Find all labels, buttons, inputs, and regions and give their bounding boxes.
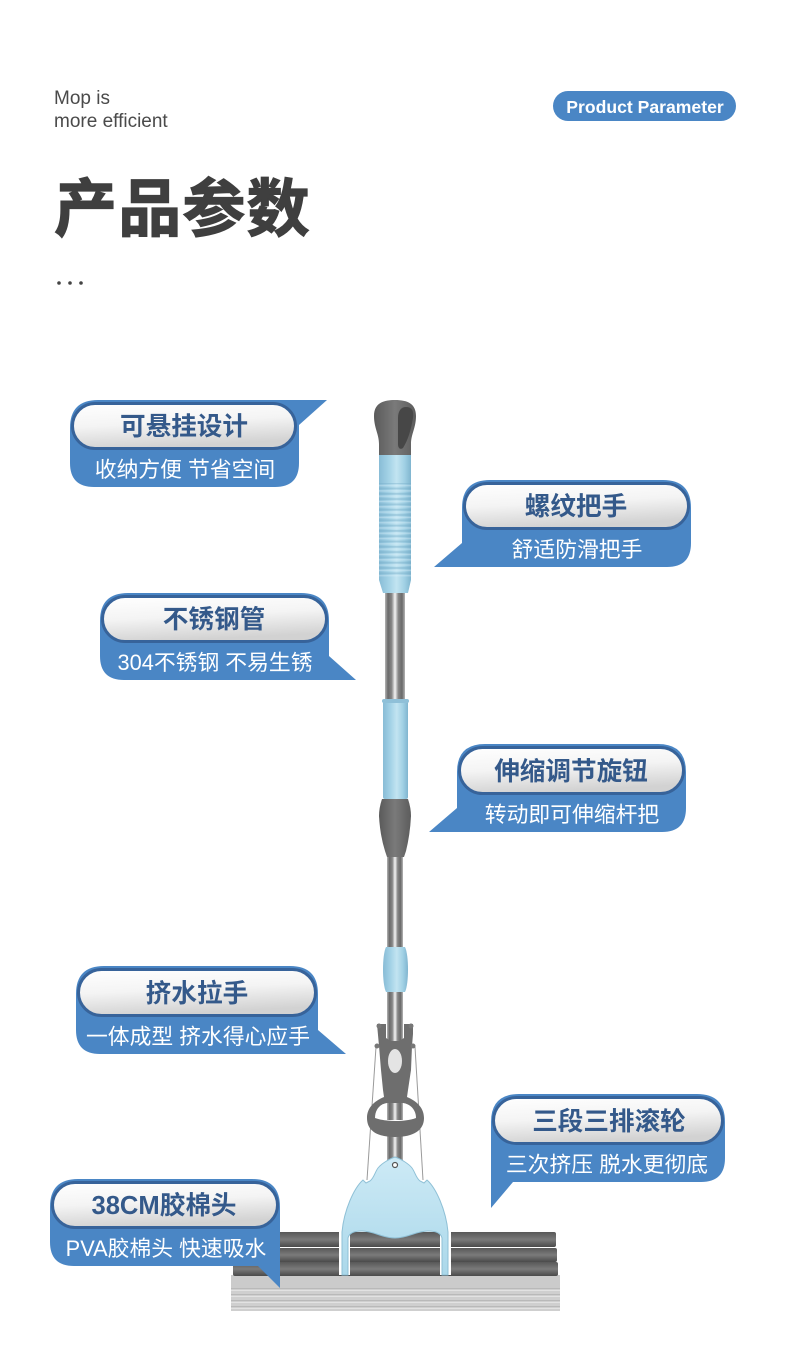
intro text: Mop is more efficient: Mop is [54, 88, 110, 109]
callout: 38CM sponge head: PVA胶棉头 快速吸水 [66, 1236, 267, 1261]
callout: stainless steel tube: 304不锈钢 不易生锈 [117, 650, 313, 675]
callout: squeeze handle [76, 966, 346, 1054]
grip section [379, 455, 411, 593]
title: 产品参数 [54, 159, 311, 250]
callout: threaded grip: 舒适防滑把手 [512, 537, 642, 562]
callout: triple rollers: 三段三排滚轮 [532, 1106, 686, 1136]
callout: 38CM sponge head [50, 1179, 280, 1288]
head rivet [392, 1162, 398, 1168]
intro text: Mop is more efficient [54, 88, 168, 132]
intro text: Mop is more efficient: more efficient [54, 111, 168, 132]
callout: 38CM sponge head: 38CM胶棉头 [91, 1191, 237, 1220]
mop upper tube [385, 590, 405, 702]
squeeze handle [367, 1024, 424, 1161]
callout: squeeze handle: 挤水拉手 [146, 978, 248, 1008]
hanging cap [374, 400, 416, 455]
handle bulge [383, 947, 408, 992]
callout: squeeze handle: 一体成型 挤水得心应手 [86, 1024, 310, 1049]
callout: hanging design [70, 400, 327, 487]
telescopic sleeve [382, 699, 409, 799]
mop illustration [231, 400, 560, 1311]
callout: hanging design: 可悬挂设计 [120, 412, 248, 441]
callout: telescopic knob [429, 744, 686, 832]
squeeze wires [367, 1047, 423, 1180]
callout: telescopic knob: 转动即可伸缩杆把 [485, 802, 659, 827]
callout: telescopic knob: 伸缩调节旋钮 [494, 757, 648, 786]
mop head [342, 1157, 448, 1275]
ellipsis dots [57, 281, 83, 285]
callout: stainless steel tube [100, 593, 356, 680]
callout: triple rollers: 三次挤压 脱水更彻底 [506, 1152, 708, 1177]
mop lower tube [387, 857, 403, 1167]
badge: Product Parameter: Product Parameter [566, 97, 724, 117]
mop sponge and rollers [231, 1230, 560, 1311]
callout: threaded grip: 螺纹把手 [525, 492, 627, 521]
callout: threaded grip [434, 480, 691, 567]
telescopic knob [379, 799, 411, 857]
callout: stainless steel tube: 不锈钢管 [163, 605, 265, 634]
callout: hanging design: 收纳方便 节省空间 [95, 457, 275, 482]
callout: triple rollers [491, 1094, 725, 1208]
badge: Product Parameter [553, 91, 736, 121]
